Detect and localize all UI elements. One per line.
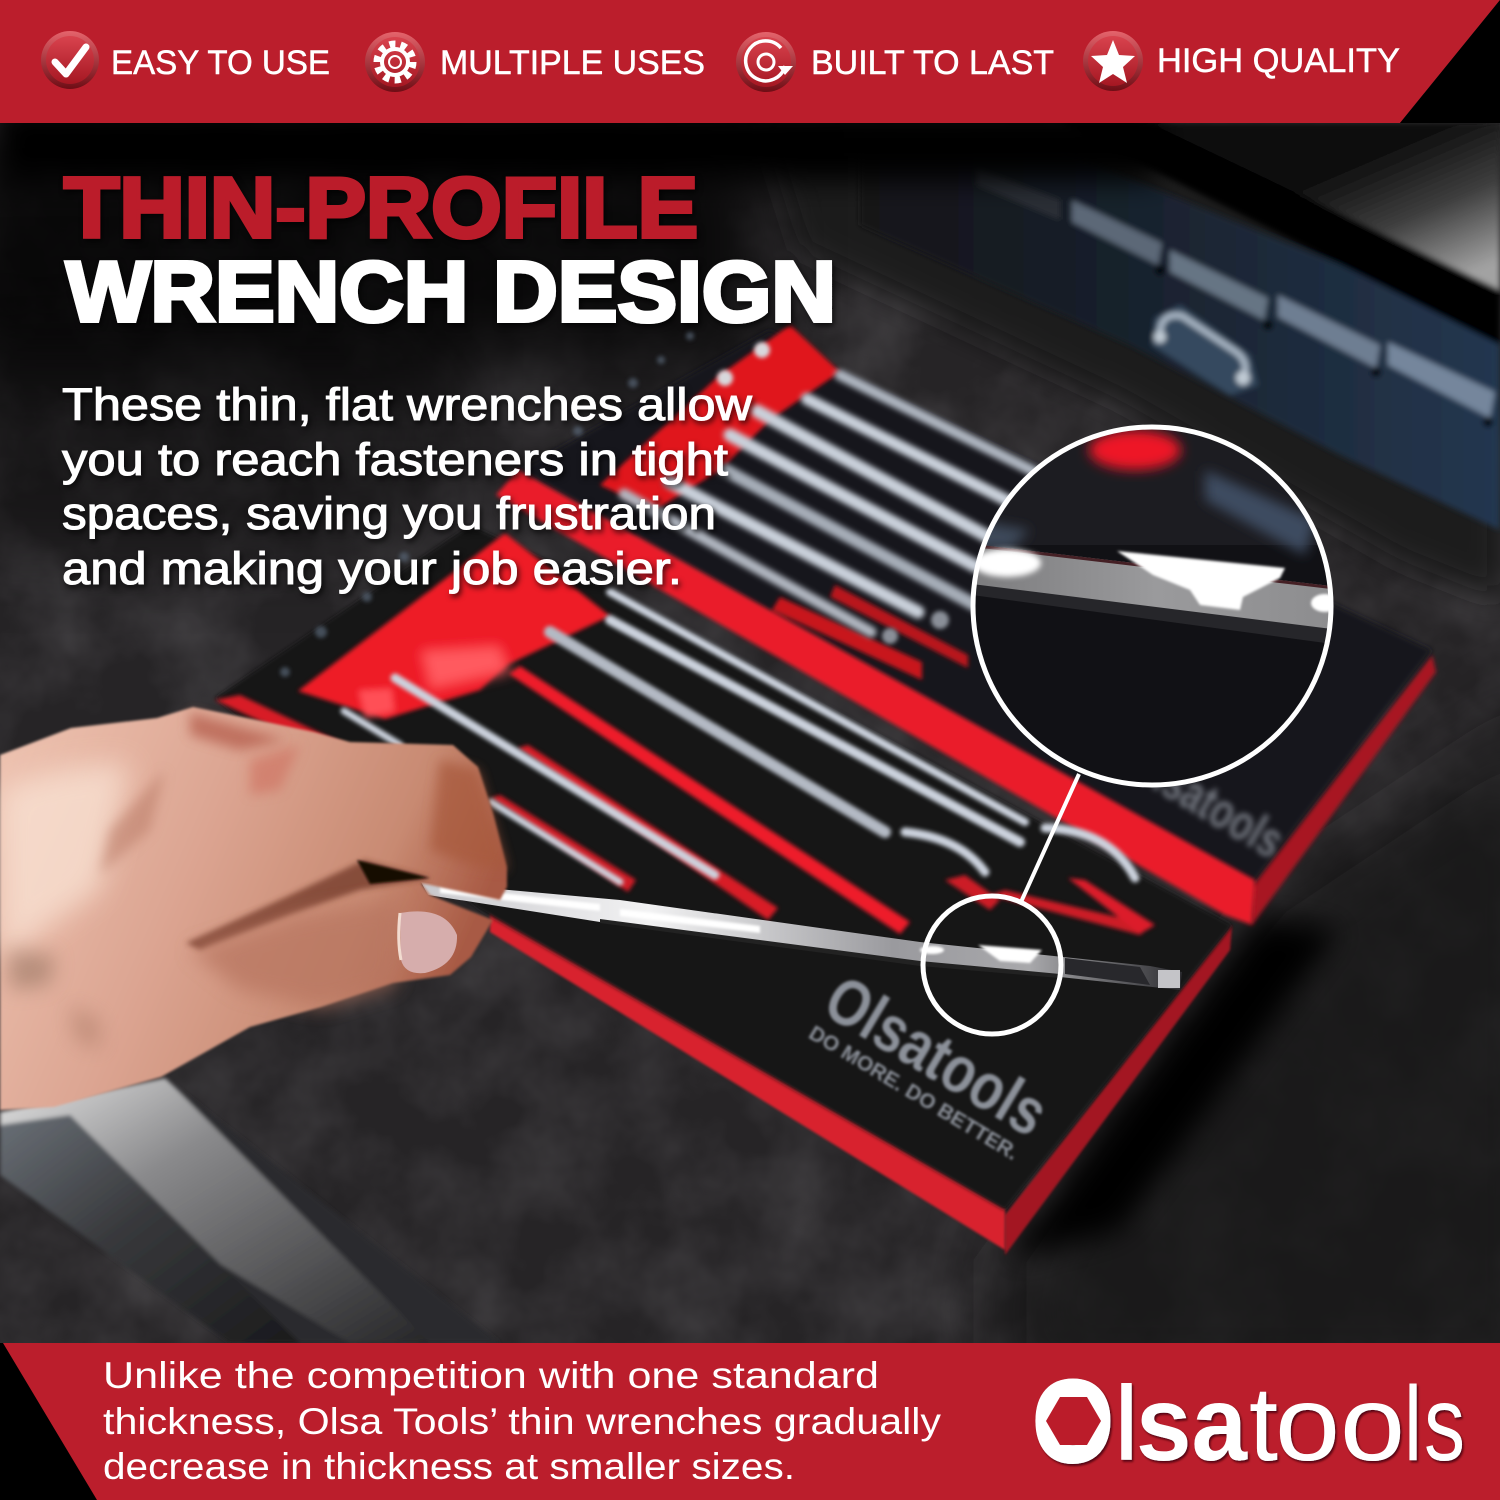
hand shading — [0, 764, 130, 960]
logo: Olsatools: t — [1249, 1365, 1278, 1483]
pulled wrench — [421, 882, 1182, 990]
back tray red slots — [496, 325, 1255, 925]
silver drawer rail — [0, 1078, 500, 1343]
logo: Olsatools — [1034, 1359, 1465, 1484]
hand holding wrench — [0, 707, 507, 1110]
back tray faded logo: Olsatools — [1119, 733, 1294, 869]
front foam tray — [215, 332, 1232, 1255]
icon: star badge — [1083, 31, 1143, 91]
comparison text — [103, 1355, 942, 1487]
benefit: built to last — [736, 32, 1054, 92]
back foam tray — [496, 325, 1436, 925]
tray size markers — [280, 332, 694, 677]
comparison text: decrease in thickness at smaller sizes. — [103, 1446, 795, 1487]
body text: you to reach fasteners in tight — [62, 434, 729, 485]
thumbnail — [400, 911, 457, 973]
comparison text: thickness, Olsa Tools’ thin wrenches gradually — [103, 1401, 942, 1442]
magnified circle: big — [970, 425, 1340, 785]
icon: cycle gear badge — [736, 32, 796, 92]
top red banner — [0, 0, 1500, 123]
heading: WRENCH DESIGN — [66, 245, 836, 340]
body text: and making your job easier. — [62, 543, 682, 594]
bottom red banner — [0, 1343, 1500, 1500]
back tray sockets — [717, 342, 949, 644]
front tray logo: DO MORE. DO BETTER. — [805, 1022, 1022, 1165]
magnifier circle: small — [923, 896, 1061, 1034]
logo: Olsatools: O — [1034, 1359, 1112, 1484]
icon: check badge — [41, 31, 99, 89]
top shadow under banner — [0, 110, 1160, 180]
logo: Olsatools: l — [1116, 1365, 1137, 1483]
benefit: high quality — [1083, 31, 1400, 91]
logo: Olsatools: sa — [1136, 1365, 1248, 1483]
logo: Olsatools: s — [1424, 1365, 1465, 1483]
logo: Olsatools: l — [1404, 1365, 1422, 1483]
logo: Olsatools: oo — [1275, 1365, 1405, 1483]
comparison text: Unlike the competition with one standard — [103, 1355, 879, 1396]
front tray logo: Olsatools — [813, 961, 1061, 1150]
back tray wrenches — [624, 375, 1035, 632]
benefit: easy to use: EASY TO USE — [111, 44, 330, 82]
left shadow behind heading — [0, 130, 760, 370]
benefit: built to last: BUILT TO LAST — [811, 44, 1054, 82]
magnifier connector line — [1021, 774, 1079, 902]
body text: spaces, saving you frustration — [62, 488, 716, 539]
front tray wrenches — [344, 592, 1135, 882]
body text: These thin, flat wrenches allow — [62, 379, 753, 430]
benefit: easy to use — [41, 31, 330, 89]
benefit: multiple uses: MULTIPLE USES — [440, 44, 705, 82]
floor shading — [1000, 700, 1500, 1400]
drawer handle — [1152, 305, 1258, 395]
front tray red cutouts — [215, 533, 1155, 935]
benefit: high quality: HIGH QUALITY — [1157, 42, 1400, 80]
body text — [62, 379, 753, 594]
icon: gear badge — [365, 32, 425, 92]
heading: THIN-PROFILE — [64, 161, 698, 256]
benefit: multiple uses — [365, 32, 705, 92]
heading — [64, 161, 836, 340]
drawer back wall — [760, 123, 1500, 600]
